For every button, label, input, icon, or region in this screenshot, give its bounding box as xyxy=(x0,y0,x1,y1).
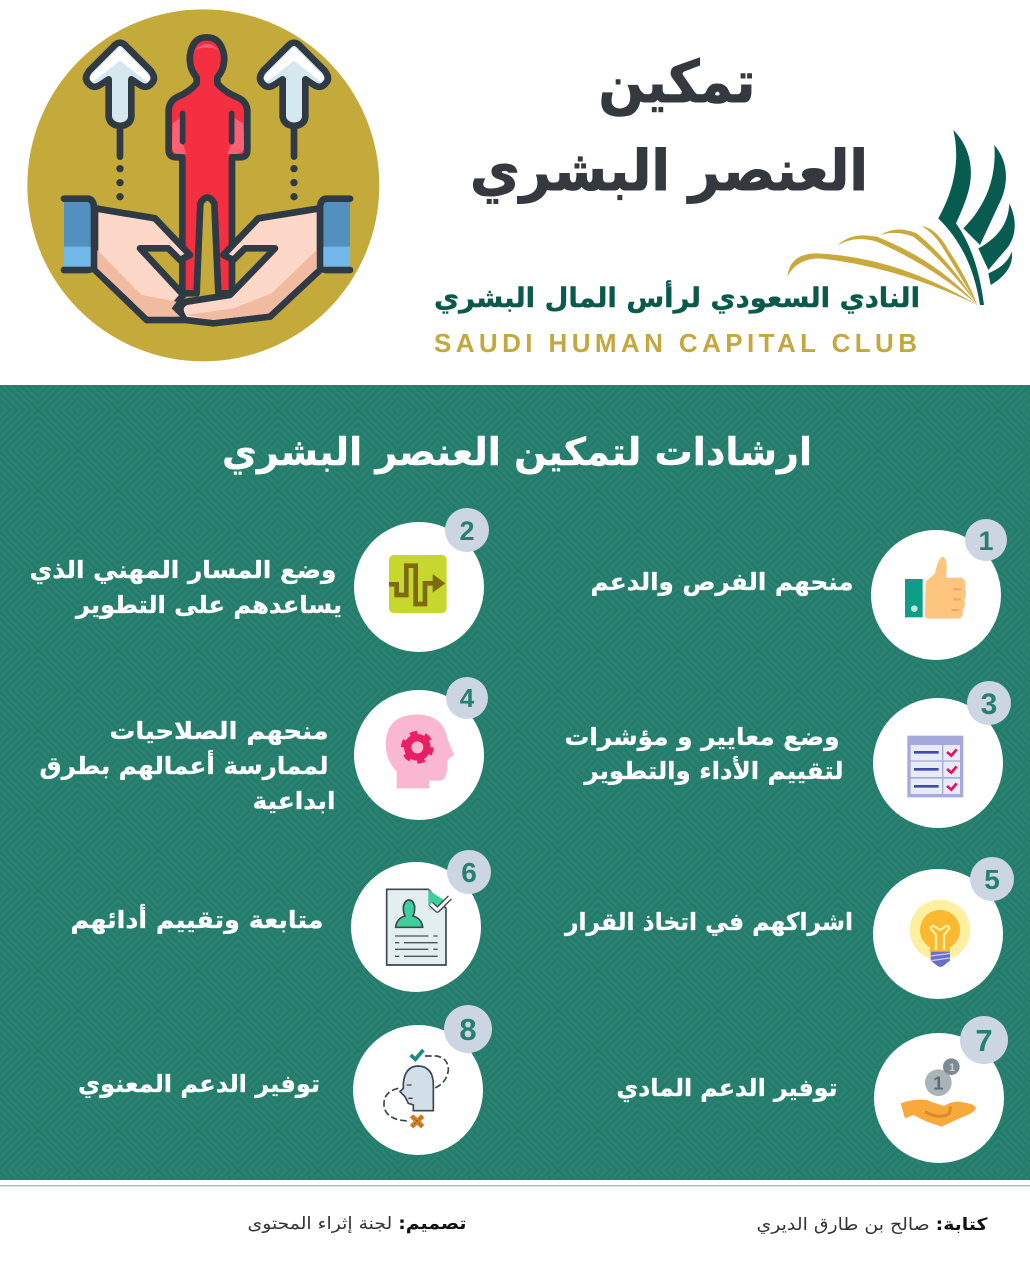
item 1 xyxy=(590,519,1007,660)
item 4: منحهم الصلاحيات xyxy=(110,717,328,745)
item 4: ابداعية xyxy=(252,787,336,815)
item 5 xyxy=(564,857,1014,999)
item 5: اشراكهم في اتخاذ القرار xyxy=(564,908,853,936)
footer divider xyxy=(0,1185,1030,1186)
item 3: 3 xyxy=(981,688,997,721)
logo: Saudi Human Capital Club xyxy=(434,130,1015,358)
footer: design credit: تصميم: لجنة إثراء المحتوى xyxy=(248,1214,466,1234)
item 4: 4 xyxy=(460,683,475,713)
logo: Saudi Human Capital Club: النادي السعودي لرأس المال البشري xyxy=(434,280,920,314)
item 6: متابعة وتقييم أدائهم xyxy=(70,904,324,934)
title: العنصر البشري xyxy=(470,139,868,204)
item 7: 1 xyxy=(949,1062,955,1074)
item 3 xyxy=(564,681,1011,828)
title: تمكين xyxy=(598,48,756,117)
item 8 xyxy=(78,1005,492,1155)
item 7 xyxy=(616,1016,1008,1163)
item 6 xyxy=(70,850,491,992)
item 4: لممارسة أعمالهم بطرق xyxy=(40,750,328,780)
logo: Saudi Human Capital Club: SAUDI HUMAN CAPITAL CLUB xyxy=(434,328,917,358)
item 6: 6 xyxy=(461,857,477,888)
item 1: منحهم الفرص والدعم xyxy=(590,568,854,596)
item 5: 5 xyxy=(984,864,1000,895)
item 2 xyxy=(30,508,489,652)
footer: author credit: كتابة: صالح بن طارق الديري xyxy=(756,1215,988,1235)
title xyxy=(470,48,868,204)
item 8: توفير الدعم المعنوي xyxy=(78,1070,320,1098)
item 1: 1 xyxy=(978,526,994,556)
item 8: 8 xyxy=(459,1012,477,1047)
item 3: وضع معايير و مؤشرات xyxy=(564,723,840,751)
illustration: hands lifting person xyxy=(27,9,379,361)
item 7: 7 xyxy=(975,1023,993,1058)
item 2: 2 xyxy=(459,516,475,546)
panel: guidelines background xyxy=(0,385,1030,1180)
item 2: يساعدهم على التطوير xyxy=(75,591,342,619)
item 7: 1 xyxy=(933,1072,944,1093)
item 3: لتقييم الأداء والتطوير xyxy=(583,756,844,785)
item 7: توفير الدعم المادي xyxy=(616,1074,838,1102)
item 4 xyxy=(40,677,488,820)
heading: ارشادات لتمكين العنصر البشري xyxy=(222,430,812,474)
item 2: وضع المسار المهني الذي xyxy=(30,556,336,584)
